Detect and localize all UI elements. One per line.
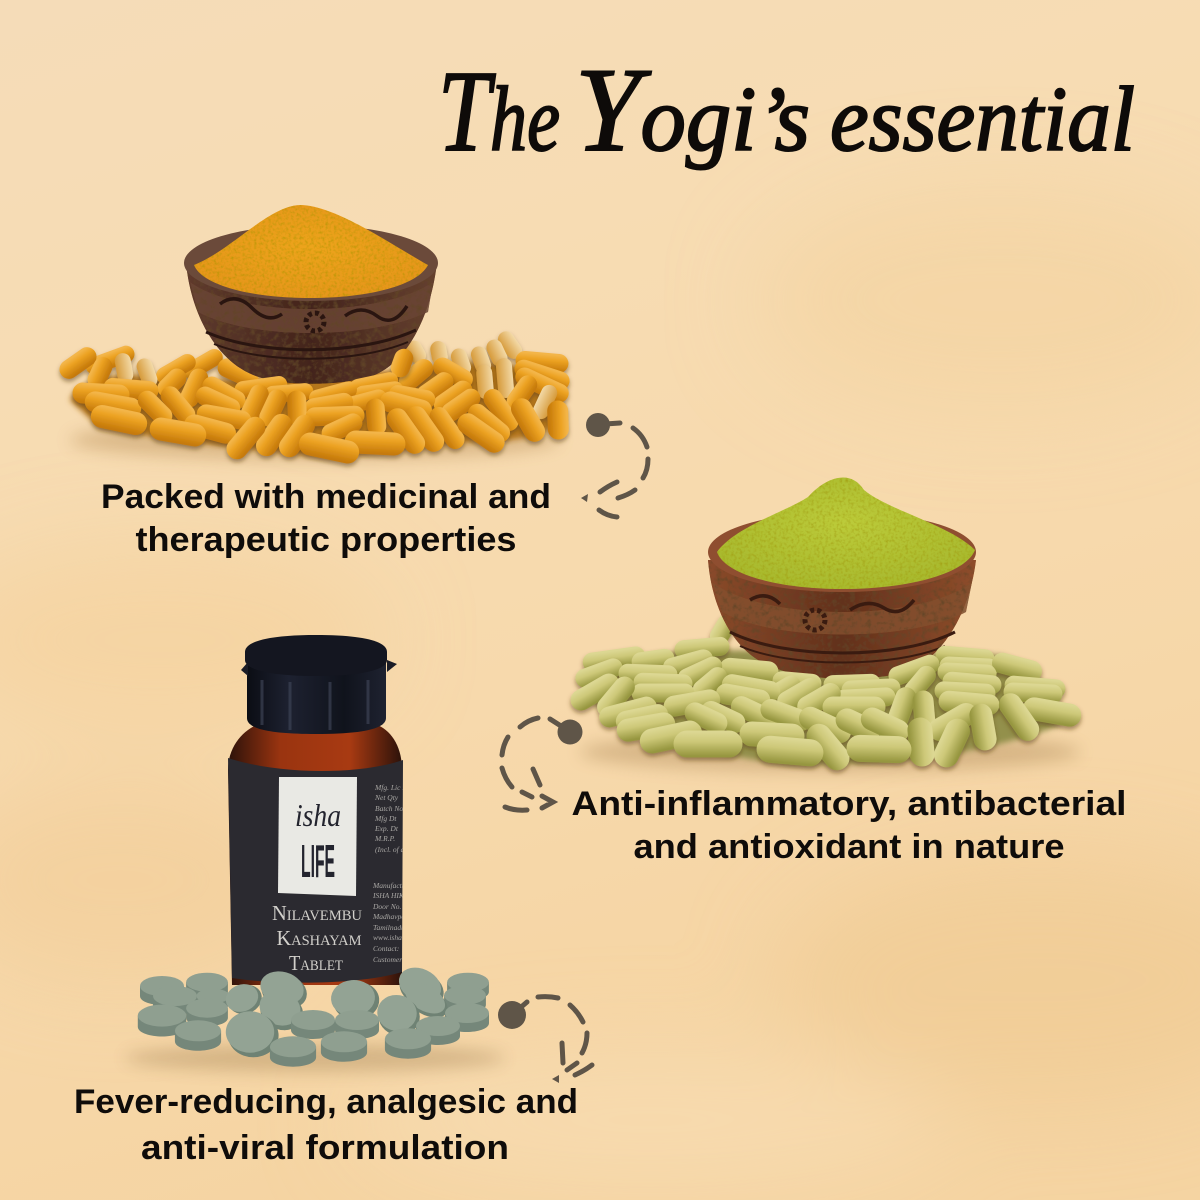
label side text: Manufactured bbox=[372, 881, 415, 890]
caption 2 bbox=[572, 785, 1126, 866]
caption 1: Packed with medicinal and bbox=[101, 478, 551, 516]
product name: Kashayam bbox=[276, 926, 362, 950]
label side text: Batch No. bbox=[375, 804, 405, 813]
logo isha: isha bbox=[295, 797, 341, 833]
arrow 3 bbox=[498, 997, 592, 1083]
green tablets bbox=[125, 961, 505, 1072]
label side text: ISHA HIKKIM bbox=[372, 891, 418, 900]
bottle: LIFE bbox=[301, 835, 335, 887]
label side text: Madhavpet bbox=[372, 912, 408, 921]
title: essential bbox=[830, 68, 1135, 170]
front capsules orange bbox=[74, 348, 570, 464]
arrow 1 bbox=[581, 413, 648, 517]
title bbox=[438, 43, 1135, 176]
label side text: Contact: bbox=[373, 944, 399, 953]
label side text: Customer bbox=[373, 955, 402, 964]
caption 3 bbox=[74, 1083, 578, 1167]
label side text: Tamilnadu bbox=[373, 923, 405, 932]
bottle bbox=[228, 635, 418, 985]
label side text: www.isha bbox=[373, 933, 402, 942]
label side text: Door No. 9 bbox=[372, 902, 407, 911]
bottle glass bbox=[228, 723, 402, 985]
caption 1: therapeutic properties bbox=[136, 521, 516, 559]
arrow 2 bbox=[502, 718, 582, 810]
label side text: Mfg Dt bbox=[374, 814, 397, 823]
caption 3: Fever-reducing, analgesic and bbox=[74, 1083, 578, 1121]
caption 2: and antioxidant in nature bbox=[634, 828, 1064, 866]
bottle label bbox=[228, 758, 403, 983]
turmeric bowl with orange capsules bbox=[58, 205, 570, 464]
product name: Nilavembu bbox=[272, 901, 362, 925]
bowl turmeric bbox=[184, 205, 438, 384]
label white panel bbox=[278, 777, 357, 896]
caption 3: anti-viral formulation bbox=[141, 1129, 509, 1167]
label side text: Mfg. Lic No. bbox=[374, 783, 413, 792]
title: Yogi’s bbox=[575, 43, 810, 176]
label side text: M.R.P. bbox=[374, 834, 395, 843]
label side text: Net Qty bbox=[374, 793, 399, 802]
bowl henna bbox=[708, 477, 976, 679]
back capsules green bbox=[583, 613, 737, 677]
title: The bbox=[438, 48, 560, 176]
product name: Tablet bbox=[289, 951, 343, 975]
bottle cap bbox=[241, 635, 397, 734]
caption 2: Anti-inflammatory, antibacterial bbox=[572, 785, 1126, 823]
front capsules green bbox=[569, 647, 1081, 773]
product name bbox=[272, 901, 362, 975]
henna bowl with green capsules bbox=[569, 477, 1081, 773]
label side text: Exp. Dt bbox=[374, 824, 399, 833]
label side text: (Incl. of all) bbox=[375, 845, 412, 854]
caption 1 bbox=[101, 478, 551, 559]
label side text bbox=[372, 784, 403, 962]
back capsules orange bbox=[58, 328, 570, 393]
